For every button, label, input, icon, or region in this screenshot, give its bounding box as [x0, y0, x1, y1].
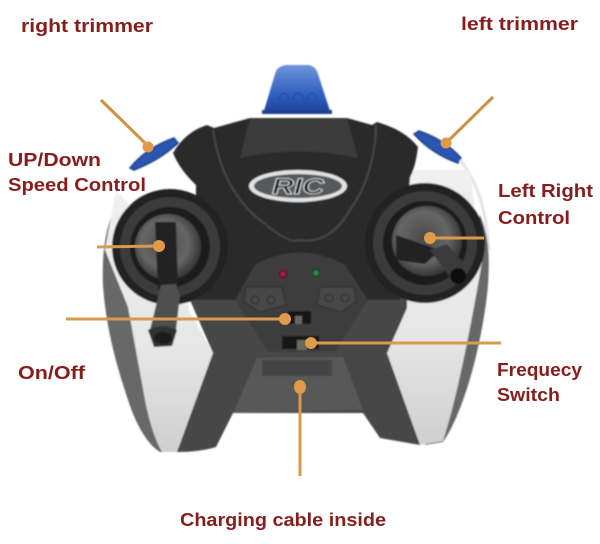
centre control plate: [235, 252, 368, 352]
label: UP/Down Speed Control: UP/Down: [8, 150, 101, 170]
right white panel: [387, 170, 482, 445]
label: UP/Down Speed Control: Speed Control: [8, 175, 146, 195]
pointer: up/down stick: [97, 240, 165, 252]
left blue trimmer: [130, 138, 178, 170]
RIC oval logo: [249, 170, 347, 202]
label: right trimmer: right trimmer: [21, 16, 153, 36]
pointer: frequency switch: [305, 337, 501, 349]
right joystick well: [365, 183, 485, 303]
on/off switch: [288, 311, 311, 324]
label: Charging cable inside: Charging cable inside: [180, 510, 386, 530]
pointer: on/off: [66, 313, 291, 325]
right joystick: [396, 235, 470, 284]
label: Left Right Control: Control: [498, 208, 570, 228]
label: Frequency Switch: Switch: [497, 385, 560, 405]
right blue trimmer: [414, 131, 489, 250]
green LED: [311, 268, 321, 278]
left grey grip: [103, 215, 180, 452]
label: Left Right Control: Left Right: [498, 181, 593, 201]
remote control illustration: [103, 65, 489, 452]
centre legs and lower body: [177, 260, 420, 452]
pointer: left trimmer: [440, 97, 493, 148]
black upper body: [173, 118, 418, 300]
label: left trimmer: left trimmer: [461, 14, 578, 34]
left white panel: [105, 190, 213, 452]
label: Frequency Switch: Frequecy: [497, 360, 582, 380]
pointer: charging cable: [294, 380, 306, 476]
red LED: [278, 269, 288, 279]
left joystick well: [112, 189, 228, 305]
pointer: left right stick: [424, 232, 484, 244]
blue antenna fin: [262, 65, 332, 114]
right grey grip: [425, 215, 489, 445]
frequency switch: [282, 336, 319, 350]
left joystick: [148, 222, 180, 347]
pointer: right trimmer: [101, 100, 154, 152]
RIC oval logo: RIC: [272, 174, 326, 199]
label: On/Off: On/Off: [18, 363, 86, 383]
